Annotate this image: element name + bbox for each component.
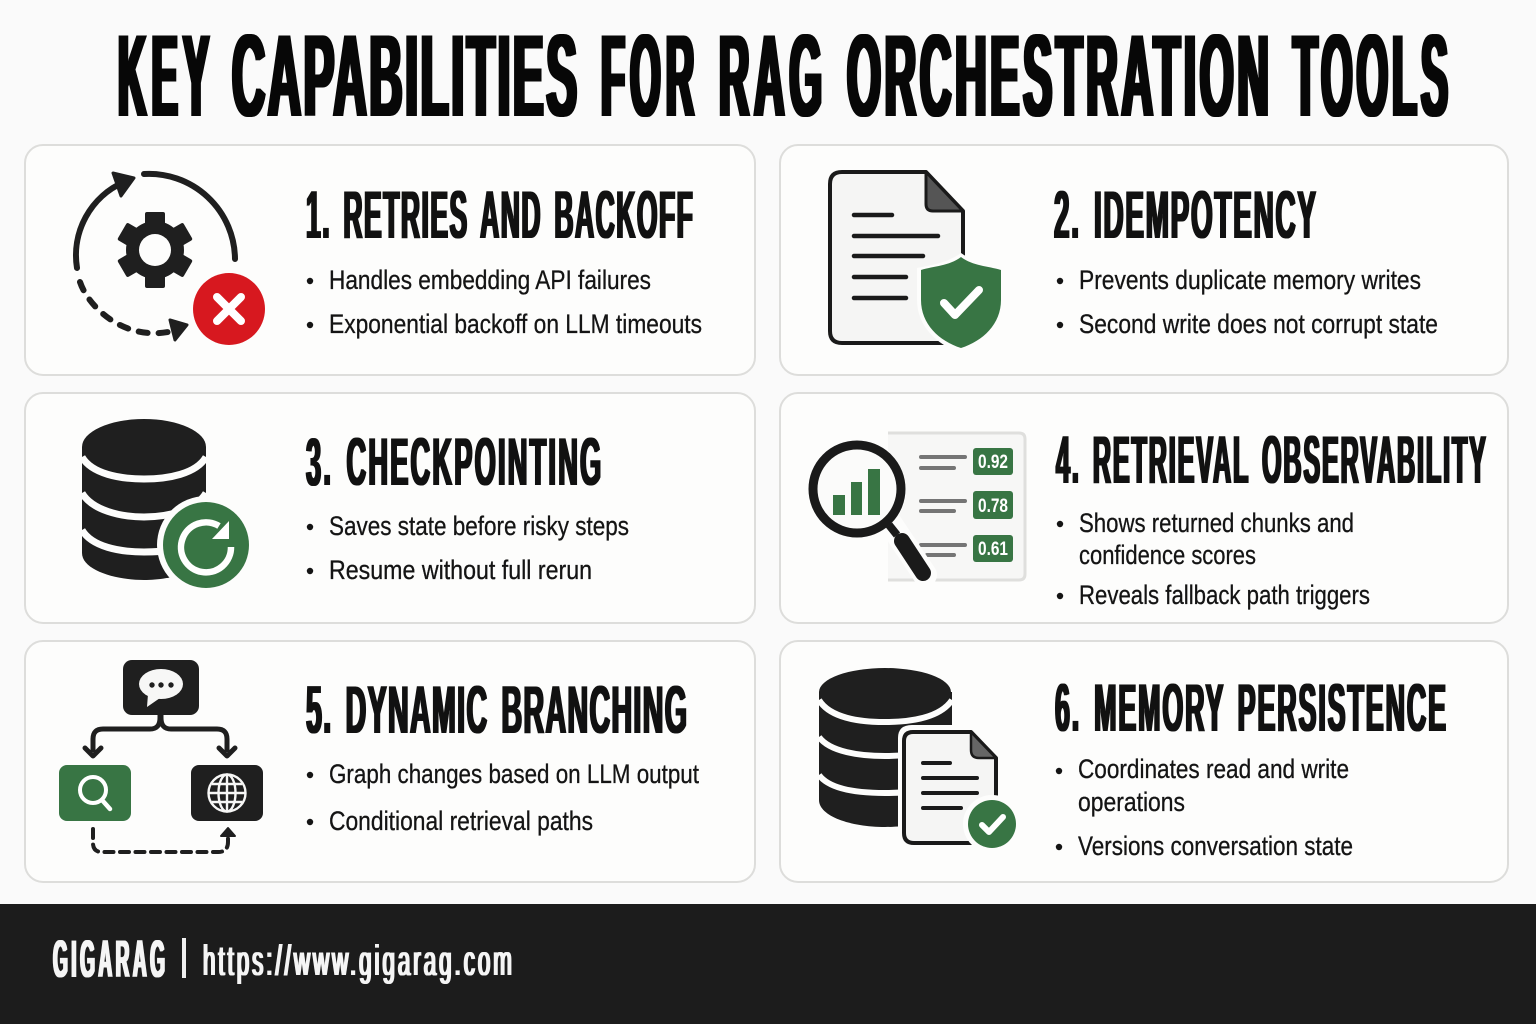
panel: retries and backoff	[25, 145, 755, 375]
title: FOR	[601, 11, 694, 141]
title: KEY	[118, 11, 209, 141]
bullet list: Conditional retrieval paths	[329, 806, 593, 836]
title: CAPABILITIES	[232, 11, 577, 141]
bullet list	[307, 265, 702, 339]
bullet list: Second write does not corrupt state	[1079, 309, 1438, 339]
bullet list: Prevents duplicate memory writes	[1079, 265, 1421, 295]
bullet list: Shows returned chunks and	[1079, 508, 1354, 538]
title: ORCHESTRATION	[847, 10, 1269, 141]
icon: document with shield	[830, 172, 1005, 353]
bullet list	[307, 511, 629, 585]
icon: magnifier over scored results	[808, 433, 1025, 580]
footer bar	[0, 904, 1536, 1024]
icon: magnifier over scored results: 0.92	[978, 452, 1008, 473]
icon: database with verified document	[819, 668, 1021, 853]
bullet list: Handles embedding API failures	[329, 265, 651, 295]
panel: retrieval observability	[780, 393, 1508, 623]
panel: memory persistence	[780, 641, 1508, 882]
bullet list: Graph changes based on LLM output	[329, 759, 699, 789]
footer url: https://www.gigarag.com	[203, 937, 512, 985]
bullet list: Exponential backoff on LLM timeouts	[329, 309, 702, 339]
bullet list: Saves state before risky steps	[329, 511, 629, 541]
heading: 3. CHECKPOINTING	[306, 423, 601, 499]
bullet list: Resume without full rerun	[329, 555, 592, 585]
heading: 2. IDEMPOTENCY	[1054, 178, 1316, 254]
bullet list	[1057, 265, 1438, 339]
title	[118, 10, 1448, 141]
bullet list: confidence scores	[1079, 540, 1256, 570]
panel: idempotency	[780, 145, 1508, 375]
bullet list: Versions conversation state	[1078, 831, 1353, 861]
footer brand: GIGARAG	[53, 930, 165, 989]
footer separator	[182, 938, 186, 978]
panel: checkpointing	[25, 393, 755, 623]
bullet list: Coordinates read and write	[1078, 754, 1349, 784]
bullet list	[1057, 508, 1370, 610]
bullet list: operations	[1078, 787, 1185, 817]
title: TOOLS	[1293, 10, 1448, 141]
icon: branching flow	[59, 660, 263, 852]
title: RAG	[719, 10, 822, 141]
heading: 1. RETRIES AND BACKOFF	[306, 176, 693, 252]
icon: database with restore	[82, 419, 255, 594]
bullet list	[1056, 754, 1353, 861]
icon: retry cycle with gear and failure	[76, 173, 265, 345]
heading: 6. MEMORY PERSISTENCE	[1055, 669, 1446, 745]
panel: dynamic branching	[25, 641, 755, 882]
heading: 5. DYNAMIC BRANCHING	[306, 673, 687, 749]
icon: magnifier over scored results: 0.61	[978, 539, 1008, 560]
icon: magnifier over scored results: 0.78	[978, 496, 1008, 517]
heading: 4. RETRIEVAL OBSERVABILITY	[1056, 422, 1486, 498]
bullet list: Reveals fallback path triggers	[1079, 580, 1370, 610]
bullet list	[307, 759, 699, 836]
